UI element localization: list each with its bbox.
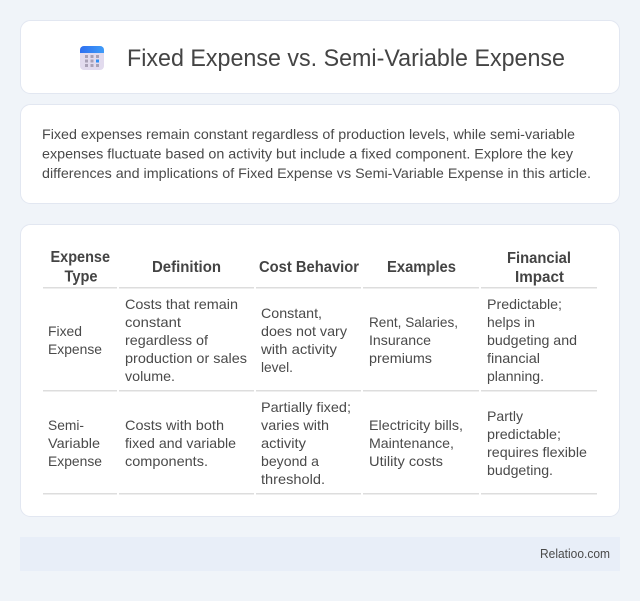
- panel: introduction: [20, 104, 620, 204]
- row: semi-variable expense: budgeting.: [487, 462, 553, 478]
- icon: calendar: [80, 46, 104, 70]
- intro text: Fixed expenses remain constant regardless of production levels, while semi-variable: [42, 126, 575, 142]
- row: semi-variable expense: requires flexible: [487, 444, 587, 460]
- intro text: expenses fluctuate based on activity but include a fixed component. Explore the key: [42, 146, 573, 162]
- row: fixed expense: [48, 296, 577, 384]
- row: fixed expense: financial: [487, 350, 540, 366]
- row: fixed expense: Costs that remain: [125, 296, 238, 312]
- row: fixed expense: helps in: [487, 314, 535, 330]
- table header: Financial: [507, 250, 571, 267]
- panel: comparison table: [20, 224, 620, 516]
- row: semi-variable expense: beyond a: [261, 453, 319, 469]
- row: semi-variable expense: Variable: [48, 435, 100, 451]
- table header: Type: [64, 268, 98, 286]
- table header: Cost Behavior: [259, 259, 359, 276]
- row: semi-variable expense: Semi-: [48, 417, 84, 433]
- row: fixed expense: with activity: [260, 341, 337, 357]
- row: fixed expense: premiums: [369, 350, 432, 366]
- row: fixed expense: Predictable;: [487, 296, 562, 312]
- row: semi-variable expense: [48, 399, 587, 487]
- table header: Examples: [387, 259, 456, 276]
- row: fixed expense: Fixed: [48, 323, 82, 339]
- intro text: [42, 126, 591, 181]
- row: fixed expense: Rent, Salaries,: [369, 314, 458, 330]
- table header: [50, 249, 571, 286]
- row: semi-variable expense: Electricity bills,: [369, 417, 463, 433]
- row: fixed expense: constant: [125, 314, 181, 330]
- footer: [20, 537, 620, 571]
- row: semi-variable expense: Partially fixed;: [261, 399, 351, 415]
- row: fixed expense: volume.: [125, 368, 175, 384]
- row: semi-variable expense: components.: [125, 453, 208, 469]
- row: semi-variable expense: Costs with both: [125, 417, 224, 433]
- row: semi-variable expense: Expense: [48, 453, 102, 469]
- row: semi-variable expense: varies with: [261, 417, 329, 433]
- intro text: differences and implications of Fixed Expense vs Semi-Variable Expense in this article.: [42, 165, 591, 181]
- row: fixed expense: Expense: [48, 341, 102, 357]
- row: semi-variable expense: predictable;: [487, 426, 561, 442]
- panel: header: [20, 20, 620, 94]
- table header: Expense: [50, 249, 110, 266]
- row: semi-variable expense: Utility costs: [369, 453, 443, 469]
- row: fixed expense: production or sales: [125, 350, 247, 366]
- row: semi-variable expense: Maintenance,: [369, 435, 454, 451]
- row: fixed expense: budgeting and: [487, 332, 577, 348]
- row: fixed expense: Constant,: [261, 305, 322, 321]
- row: semi-variable expense: activity: [261, 435, 306, 451]
- title: Fixed Expense vs. Semi-Variable Expense: [127, 45, 565, 72]
- table header: Impact: [515, 269, 565, 286]
- table header: Definition: [152, 259, 221, 276]
- footer credit: Relatioo.com: [540, 547, 610, 561]
- row: fixed expense: regardless of: [125, 332, 208, 348]
- row: semi-variable expense: fixed and variable: [125, 435, 236, 451]
- row: fixed expense: planning.: [487, 368, 544, 384]
- row: fixed expense: Insurance: [369, 332, 431, 348]
- row: fixed expense: level.: [261, 359, 293, 375]
- row: fixed expense: does not vary: [261, 323, 347, 339]
- row: semi-variable expense: threshold.: [261, 471, 325, 487]
- row: semi-variable expense: Partly: [487, 408, 523, 424]
